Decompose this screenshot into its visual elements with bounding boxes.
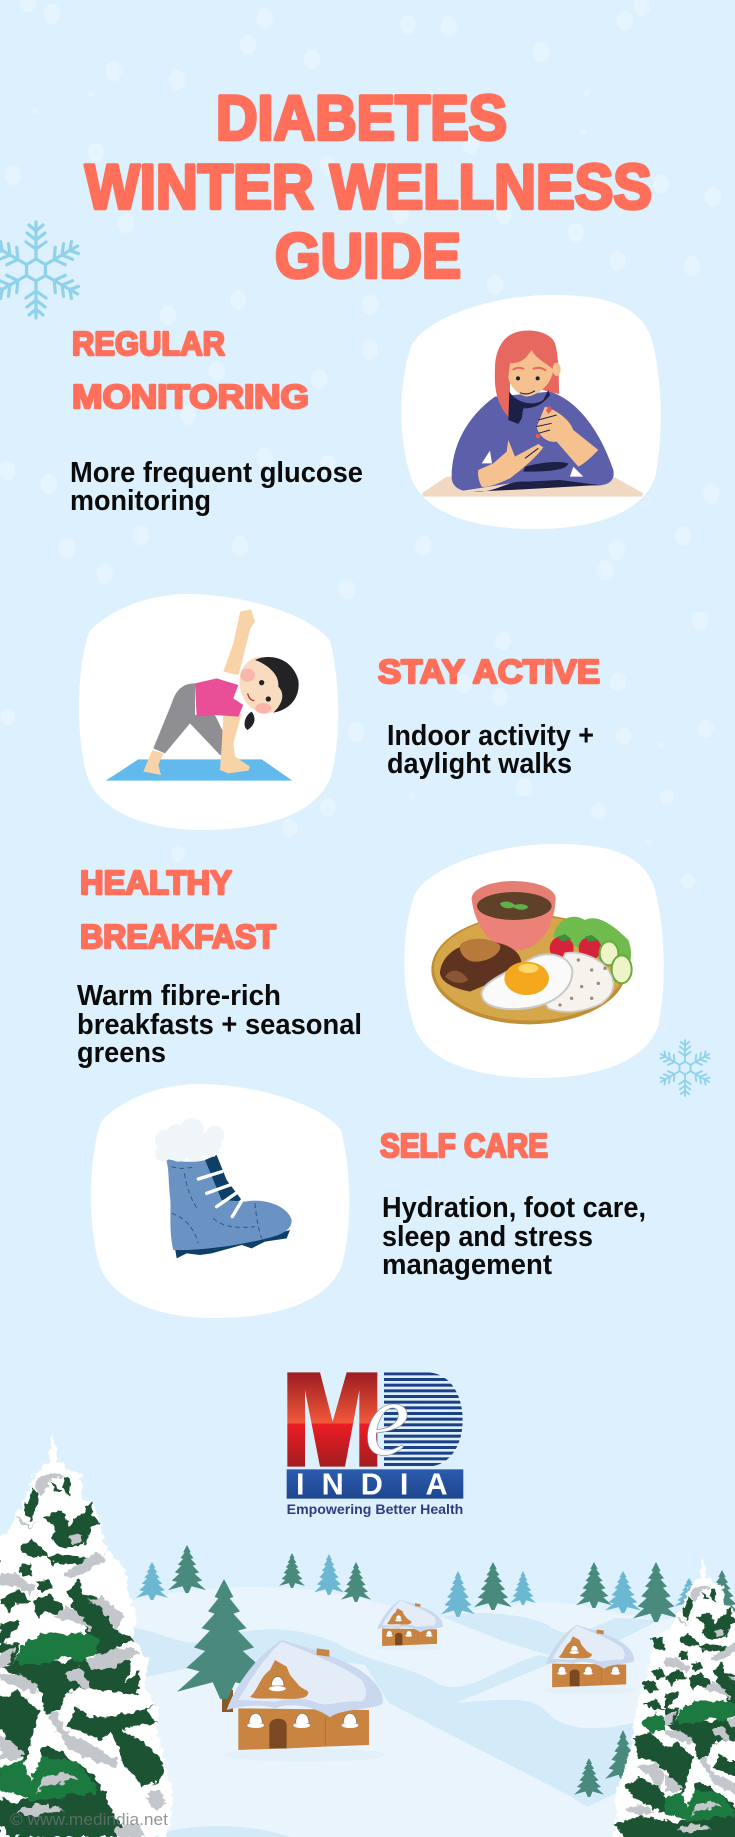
text block: Hydration, foot care,	[382, 1192, 646, 1224]
icon: woman checking glucose	[422, 330, 643, 497]
text block: breakfasts + seasonal	[77, 1009, 362, 1041]
text block	[387, 720, 594, 780]
text block	[70, 457, 363, 517]
falling snow dots	[0, 0, 721, 888]
panel: stay active	[79, 594, 600, 830]
watermark: © www.medindia.net	[10, 1810, 168, 1829]
heading: STAY ACTIVE	[378, 654, 600, 691]
icon: breakfast plate	[431, 881, 632, 1024]
cottages	[225, 1600, 635, 1762]
Medindia logo: INDIA	[296, 1468, 448, 1502]
snow-covered fir tree right	[610, 1557, 735, 1837]
heading: HEALTHY	[80, 865, 232, 902]
title	[85, 84, 652, 292]
text block: greens	[77, 1037, 166, 1069]
white blob	[401, 295, 661, 529]
snow-covered fir tree left	[0, 1434, 173, 1837]
Medindia logo: e	[364, 1360, 409, 1478]
text block	[77, 980, 362, 1069]
white blob	[79, 594, 338, 830]
snowy landscape	[100, 1587, 735, 1837]
text block: daylight walks	[387, 748, 572, 780]
heading: MONITORING	[72, 379, 309, 416]
title: DIABETES	[216, 84, 507, 154]
large pine tree	[177, 1579, 271, 1712]
Medindia logo	[287, 1360, 464, 1517]
heading: REGULAR	[72, 326, 225, 363]
text block: management	[382, 1249, 552, 1281]
text block: Warm fibre-rich	[77, 980, 281, 1012]
icon: girl doing yoga	[106, 609, 299, 781]
heading	[80, 865, 277, 956]
title: WINTER WELLNESS	[85, 152, 652, 222]
title: GUIDE	[275, 222, 461, 292]
Medindia logo: Empowering Better Health	[287, 1501, 463, 1517]
icon: large snowflake left	[0, 222, 83, 318]
heading: BREAKFAST	[80, 919, 277, 956]
white blob	[404, 844, 664, 1078]
text block	[382, 1192, 646, 1281]
text block: sleep and stress	[382, 1221, 593, 1253]
panel: self care	[91, 1084, 646, 1318]
white blob	[91, 1084, 349, 1318]
text block: More frequent glucose	[70, 457, 363, 489]
text block: monitoring	[70, 485, 211, 517]
panel: healthy breakfast	[77, 844, 664, 1078]
heading	[72, 326, 309, 416]
heading: SELF CARE	[380, 1128, 548, 1165]
panel: regular monitoring	[70, 295, 661, 529]
distant pine trees	[136, 1545, 735, 1797]
icon: winter boot	[155, 1118, 292, 1258]
icon: small snowflake right	[658, 1040, 712, 1096]
text block: Indoor activity +	[387, 720, 594, 752]
